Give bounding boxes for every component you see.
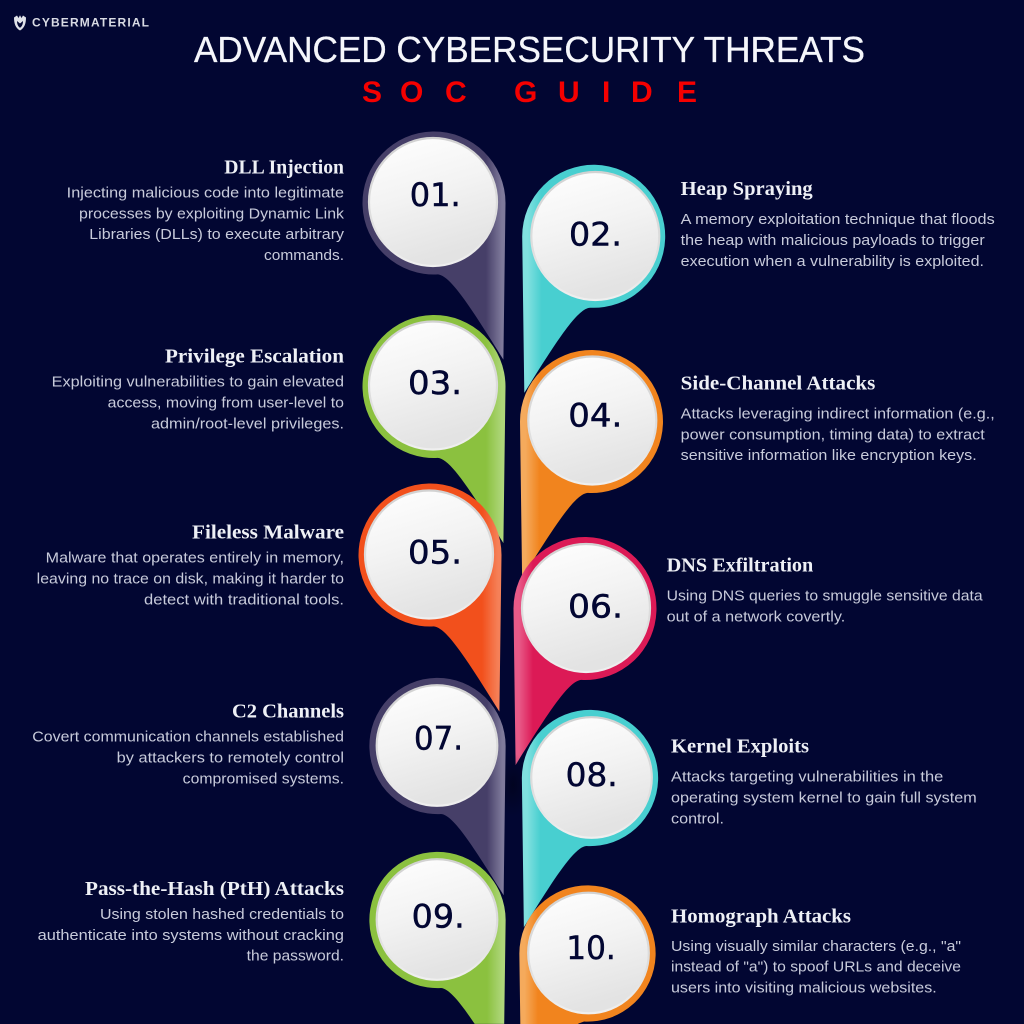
pin 04: [520, 350, 663, 578]
text: Homograph Attacks: [671, 905, 961, 997]
text: Side-Channel Attacks: [681, 372, 995, 464]
description: Attacks targeting vulnerabilities in the: [671, 769, 943, 786]
description: the password.: [247, 948, 344, 965]
description: sensitive information like encryption keys.: [681, 447, 977, 464]
description: [67, 184, 345, 264]
description: out of a network covertly.: [667, 608, 845, 625]
heading: Side-Channel Attacks: [681, 372, 876, 394]
logo: CyberMaterial: [14, 15, 149, 30]
pin 08: [522, 710, 658, 927]
description: Attacks leveraging indirect information (e.g.,: [681, 405, 995, 422]
pin 05: [358, 484, 502, 712]
description: Using visually similar characters (e.g., "a": [671, 938, 961, 955]
description: [667, 588, 983, 625]
logo wordmark: CYBERMATERIAL: [32, 16, 149, 30]
pin 09: [369, 852, 506, 1024]
shadow between pins: [497, 753, 529, 817]
heading: Fileless Malware: [192, 522, 344, 544]
pin 06: 06.: [568, 587, 623, 625]
description: execution when a vulnerability is exploited.: [681, 253, 984, 270]
description: [52, 374, 344, 433]
description: admin/root-level privileges.: [151, 416, 344, 433]
description: [32, 729, 344, 787]
icon: shield: [14, 15, 26, 30]
pin 01: 01.: [410, 176, 461, 214]
heading: Homograph Attacks: [671, 905, 851, 927]
pin 10: [519, 885, 656, 1024]
pin 02: [522, 165, 665, 393]
pin 07: 07.: [414, 719, 463, 757]
subtitle: SOC GUIDE: [362, 76, 697, 109]
heading: DNS Exfiltration: [667, 555, 813, 577]
description: processes by exploiting Dynamic Link: [79, 205, 345, 222]
pin 10: 10.: [566, 929, 616, 967]
pin 06: [514, 537, 656, 765]
text: Privilege Escalation: [52, 345, 344, 433]
description: Malware that operates entirely in memory,: [46, 549, 344, 566]
pin 05: 05.: [408, 533, 462, 571]
description: instead of "a") to spoof URLs and deceive: [671, 959, 961, 976]
pin 07: [369, 678, 506, 895]
text: DLL Injection: [67, 156, 345, 264]
text: DNS Exfiltration: [667, 555, 983, 625]
description: Using DNS queries to smuggle sensitive data: [667, 588, 983, 605]
heading: C2 Channels: [232, 701, 344, 723]
pin 01: [362, 132, 506, 360]
description: A memory exploitation technique that floods: [681, 211, 995, 228]
text: Pass-the-Hash (PtH) Attacks: [38, 878, 344, 965]
description: [681, 405, 995, 464]
description: detect with traditional tools.: [144, 591, 344, 608]
heading: Heap Spraying: [681, 178, 813, 200]
pin 09: 09.: [412, 897, 465, 935]
pin 04: 04.: [568, 397, 622, 435]
heading: Pass-the-Hash (PtH) Attacks: [85, 878, 344, 900]
pin 03: 03.: [408, 364, 462, 402]
description: users into visiting malicious websites.: [671, 980, 937, 997]
text: C2 Channels: [32, 701, 344, 787]
description: Libraries (DLLs) to execute arbitrary: [89, 226, 345, 243]
description: authenticate into systems without cracking: [38, 927, 344, 944]
description: [671, 769, 977, 827]
heading: DLL Injection: [224, 156, 344, 178]
text: Fileless Malware: [37, 522, 344, 608]
description: the heap with malicious payloads to trigger: [681, 232, 985, 249]
pin 08: 08.: [566, 756, 618, 794]
description: [671, 938, 961, 997]
description: by attackers to remotely control: [117, 749, 344, 766]
description: power consumption, timing data) to extract: [681, 426, 986, 443]
description: Exploiting vulnerabilities to gain elevated: [52, 374, 344, 391]
description: Covert communication channels established: [32, 729, 344, 746]
description: compromised systems.: [183, 770, 344, 787]
pin 03: [362, 315, 506, 543]
description: operating system kernel to gain full system: [671, 790, 977, 807]
description: Using stolen hashed credentials to: [100, 906, 344, 923]
heading: Kernel Exploits: [671, 735, 809, 757]
description: commands.: [264, 247, 344, 264]
description: control.: [671, 810, 724, 827]
text: Kernel Exploits: [671, 735, 977, 827]
pin 02: 02.: [569, 215, 622, 253]
text: Heap Spraying: [681, 178, 995, 270]
description: access, moving from user-level to: [108, 395, 344, 412]
description: [681, 211, 995, 270]
heading: Privilege Escalation: [165, 345, 344, 367]
title: ADVANCED CYBERSECURITY THREATS: [194, 29, 865, 70]
description: [38, 906, 344, 965]
description: leaving no trace on disk, making it harder to: [37, 570, 344, 587]
description: Injecting malicious code into legitimate: [67, 184, 344, 201]
description: [37, 549, 344, 608]
